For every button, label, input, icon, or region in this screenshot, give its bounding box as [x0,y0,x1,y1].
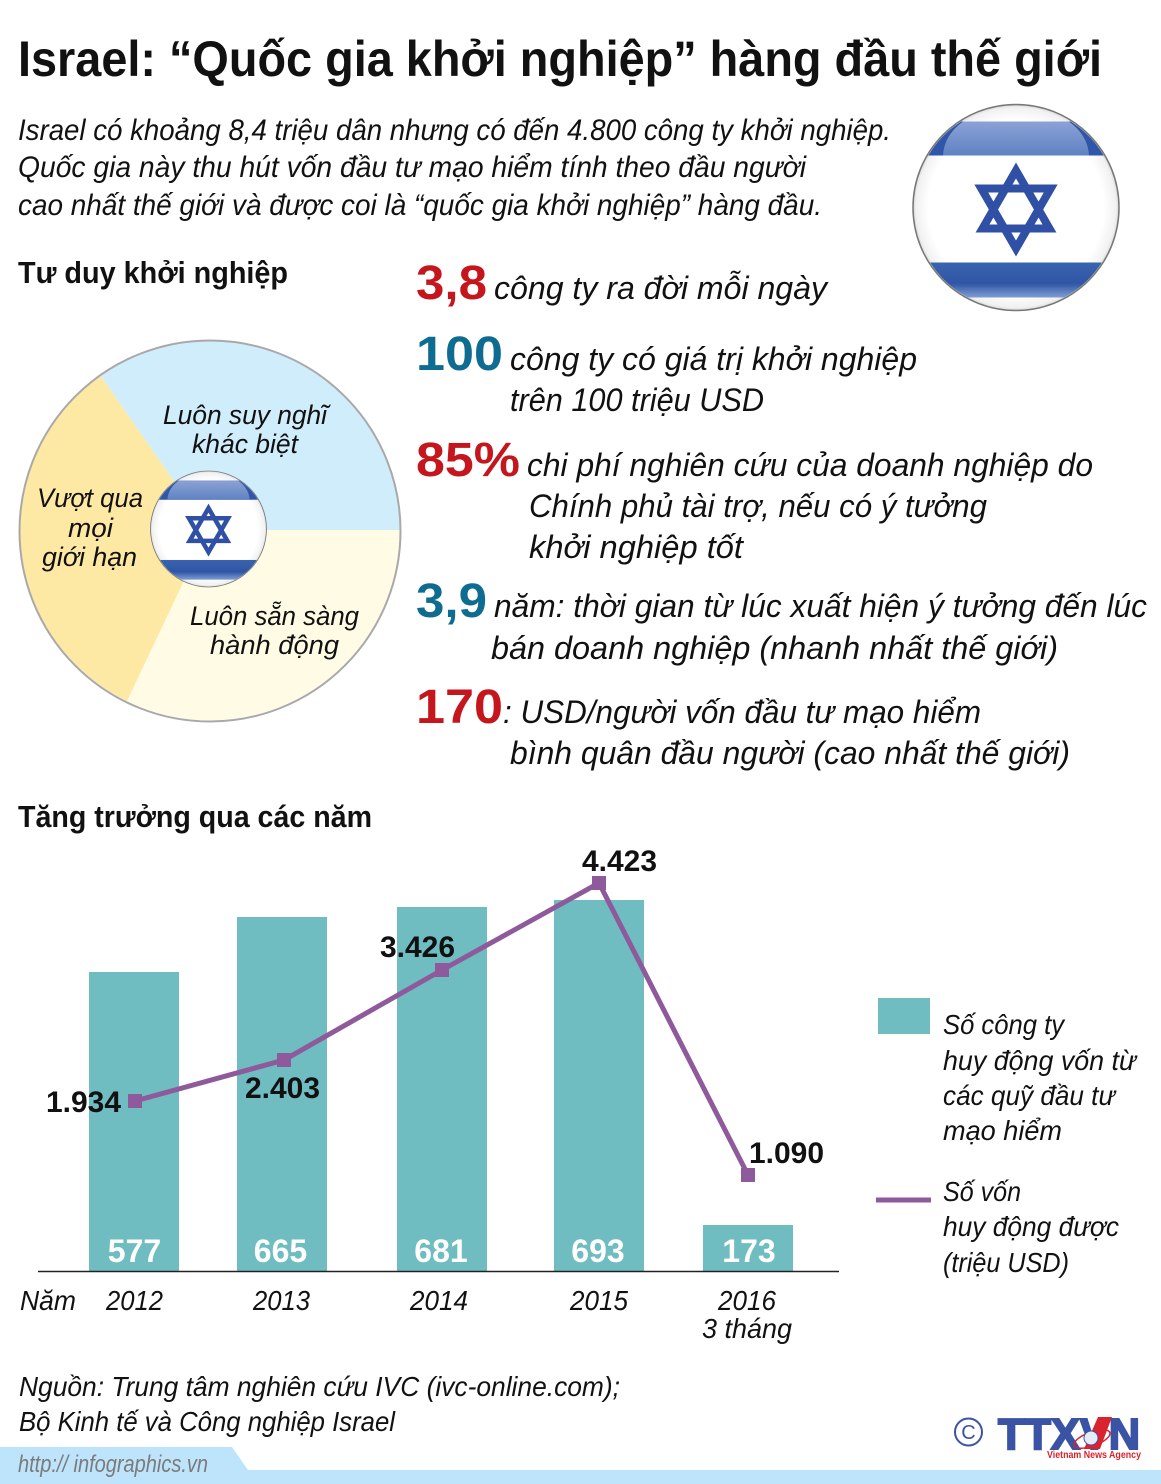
bar 2014 [397,907,487,1271]
pie segment: beyond limits [20,375,208,701]
label: think differently: Luôn suy nghĩ [163,400,331,430]
line value labels: 4.423 [582,845,657,878]
stat: 3.9 years: bán doanh nghiệp (nhanh nhất thế giới) [491,630,1058,666]
footer band with website [0,1447,1161,1484]
legend: capital raised: (triệu USD) [943,1247,1069,1278]
label: ready to act: hành động [210,630,339,660]
wordmark: Vietnam News Agency [1047,1450,1141,1461]
year axis labels: 3 tháng [702,1313,792,1344]
line value labels [46,845,824,1170]
title: Israel: “Quốc gia khởi nghiệp” hàng đầu thế giới [18,31,1102,87]
stat: 3.8 companies per day [416,257,829,310]
label: beyond limits: mọi [68,513,114,543]
label: think differently [163,400,331,459]
stat: 3.9 years: năm: thời gian từ lúc xuất hiện ý tưởng đến lúc [494,588,1147,624]
stat: 100 companies: 100 [416,328,503,381]
stat: 85 percent: khởi nghiệp tốt [529,529,744,565]
stat: 100 companies: trên 100 triệu USD [510,382,764,418]
stat: 3.9 years [416,575,1147,666]
stat: 170 USD per person: 170 [416,681,503,734]
bar 2012 [89,972,179,1271]
year axis labels: 2015 [569,1285,628,1316]
stat: 170 USD per person: : USD/người vốn đầu tư mạo hiểm [503,694,981,730]
bar 2014: 681 [414,1233,468,1269]
year axis labels: 2012 [105,1285,163,1316]
label: beyond limits: giới hạn [42,542,137,572]
legend: companies raising funds: Số công ty [943,1009,1066,1040]
bar 2016: 173 [722,1233,776,1269]
icon: Israel flag badge [913,104,1119,310]
wordmark: TTXVN [998,1410,1140,1459]
line value labels: 3.426 [380,931,455,964]
label: beyond limits [37,483,143,572]
source note [19,1371,620,1437]
label: think differently: khác biệt [192,429,299,459]
bar 2013 [237,917,327,1271]
footer band with website: http:// infographics.vn [18,1451,208,1478]
stat: 3.8 companies per day: công ty ra đời mỗi ngày [494,270,829,306]
year axis labels: 2016 [717,1285,776,1316]
legend: companies raising funds: các quỹ đầu tư [943,1080,1117,1111]
intro text block: cao nhất thế giới và được coi là “quốc gia khởi nghiệp” hàng đầu. [18,189,822,222]
pie segment: ready to act [127,530,400,720]
stat: 170 USD per person [416,681,1070,771]
legend: companies raising funds [878,998,1138,1146]
bar 2015 [554,900,644,1271]
label: ready to act: Luôn sẵn sàng [190,601,359,631]
legend: capital raised [876,1176,1119,1278]
source note: Nguồn: Trung tâm nghiên cứu IVC (ivc-online.com); [19,1371,620,1402]
year axis labels: Năm [20,1285,76,1316]
copyright mark [955,1418,982,1446]
heading: startup mindset: Tư duy khởi nghiệp [18,255,288,290]
year axis labels: 2013 [252,1285,310,1316]
pie outline [20,340,400,722]
stat: 85 percent [416,434,1093,565]
stat: 100 companies [416,328,917,418]
bar 2015: 693 [571,1233,625,1269]
bar 2016 [703,1225,793,1271]
heading: growth over the years: Tăng trưởng qua các năm [18,799,372,834]
legend: companies raising funds: huy động vốn từ [943,1045,1138,1076]
stat: 100 companies: công ty có giá trị khởi nghiệp [510,341,917,377]
icon: central Israel flag [151,471,266,587]
intro text block: Israel có khoảng 8,4 triệu dân nhưng có đến 4.800 công ty khởi nghiệp. [18,114,891,147]
intro text block: Quốc gia này thu hút vốn đầu tư mạo hiểm tính theo đầu người [18,151,807,184]
label: ready to act [190,601,359,660]
year axis labels: 2014 [409,1285,468,1316]
label: beyond limits: Vượt qua [37,483,143,513]
copyright mark: C [961,1422,976,1444]
source note: Bộ Kinh tế và Công nghiệp Israel [19,1406,396,1437]
panel: mindset pie diagram [20,340,400,722]
stat: 85 percent: 85% [416,434,520,487]
legend: capital raised: huy động được [943,1211,1119,1242]
stat: 3.8 companies per day: 3,8 [416,257,487,310]
stat: 3.9 years: 3,9 [416,575,487,628]
year axis labels [20,1285,792,1344]
logo: TTXVN Vietnam News Agency [955,1410,1141,1461]
stat: 85 percent: Chính phủ tài trợ, nếu có ý tưởng [529,488,987,524]
line series: capital raised [128,876,755,1182]
line value labels: 1.934 [46,1086,121,1119]
stat: 170 USD per person: bình quân đầu người (cao nhất thế giới) [510,735,1070,771]
pie segment: think differently [100,340,400,530]
legend: capital raised: Số vốn [943,1176,1021,1207]
chart: companies bars and capital line [20,845,839,1344]
line value labels: 1.090 [749,1137,824,1170]
intro text block [18,114,891,222]
bar 2012: 577 [108,1233,161,1269]
line value labels: 2.403 [245,1072,320,1105]
stat: 85 percent: chi phí nghiên cứu của doanh nghiệp do [527,447,1093,483]
legend: companies raising funds: mạo hiểm [943,1115,1062,1146]
bar 2013: 665 [254,1233,307,1269]
